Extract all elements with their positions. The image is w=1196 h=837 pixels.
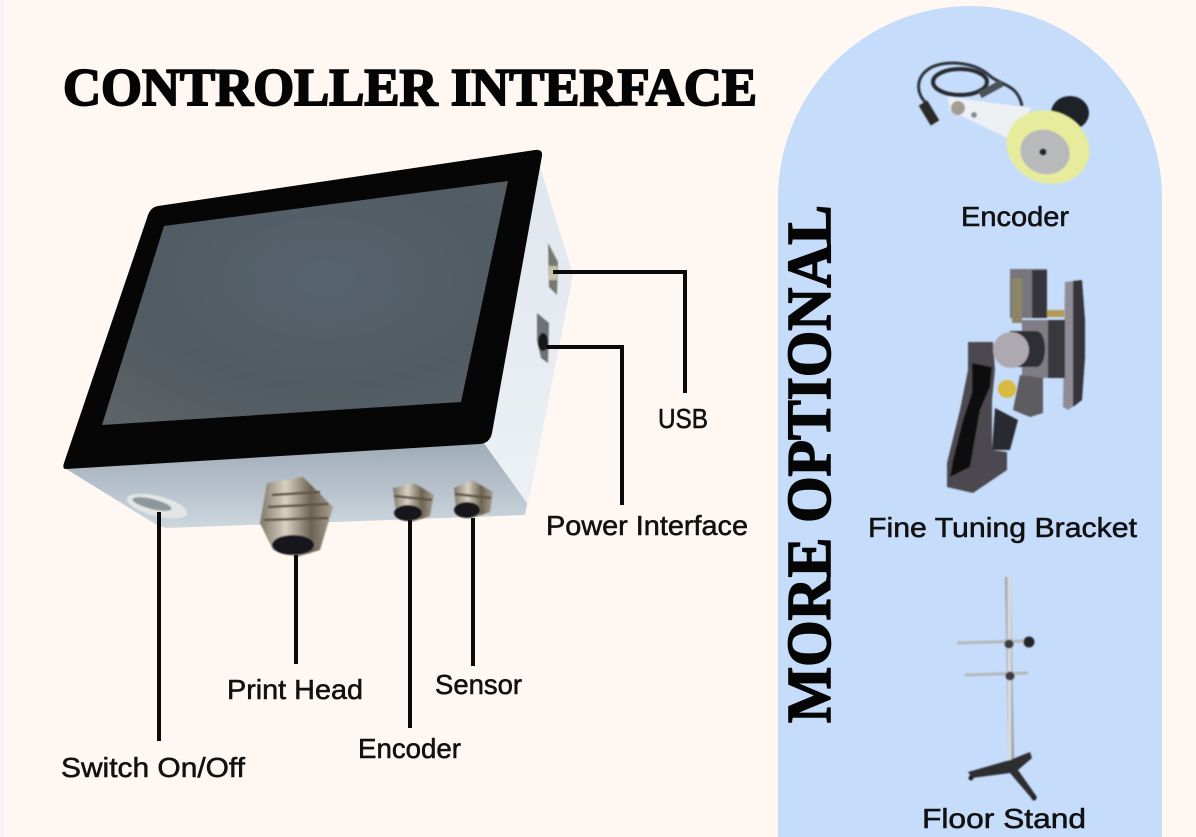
port: encoder connector xyxy=(393,483,434,522)
callout: usb xyxy=(553,272,708,434)
icon: encoder accessory xyxy=(919,63,1100,195)
label: floor stand: Floor Stand xyxy=(922,803,1086,834)
title: CONTROLLER INTERFACE xyxy=(63,59,757,117)
callout: power interface xyxy=(546,347,748,541)
callout: encoder: Encoder xyxy=(358,733,461,764)
label: fine tuning bracket: Fine Tuning Bracket xyxy=(868,512,1137,543)
port: print head gland xyxy=(260,477,333,557)
icon: fine tuning bracket xyxy=(947,269,1085,493)
callout: sensor: Sensor xyxy=(435,669,522,700)
controller device xyxy=(63,150,573,557)
panel: more optional xyxy=(776,6,1162,837)
black bezel xyxy=(63,150,542,469)
arch background xyxy=(778,6,1162,837)
port: switch xyxy=(125,489,189,523)
right side face xyxy=(483,160,573,510)
vertical heading: MORE OPTIONAL xyxy=(776,205,844,723)
port: sensor connector xyxy=(454,480,493,518)
screen xyxy=(102,181,508,425)
bottom face xyxy=(63,442,527,528)
callout: print head: Print Head xyxy=(227,674,363,705)
port: power xyxy=(537,313,549,363)
port: usb xyxy=(548,243,558,295)
label: encoder accessory: Encoder xyxy=(961,201,1069,232)
icon: floor stand xyxy=(957,577,1037,800)
callout: power interface: Power Interface xyxy=(546,510,748,541)
callout: usb: USB xyxy=(658,403,708,434)
callout: switch on/off: Switch On/Off xyxy=(61,752,245,783)
